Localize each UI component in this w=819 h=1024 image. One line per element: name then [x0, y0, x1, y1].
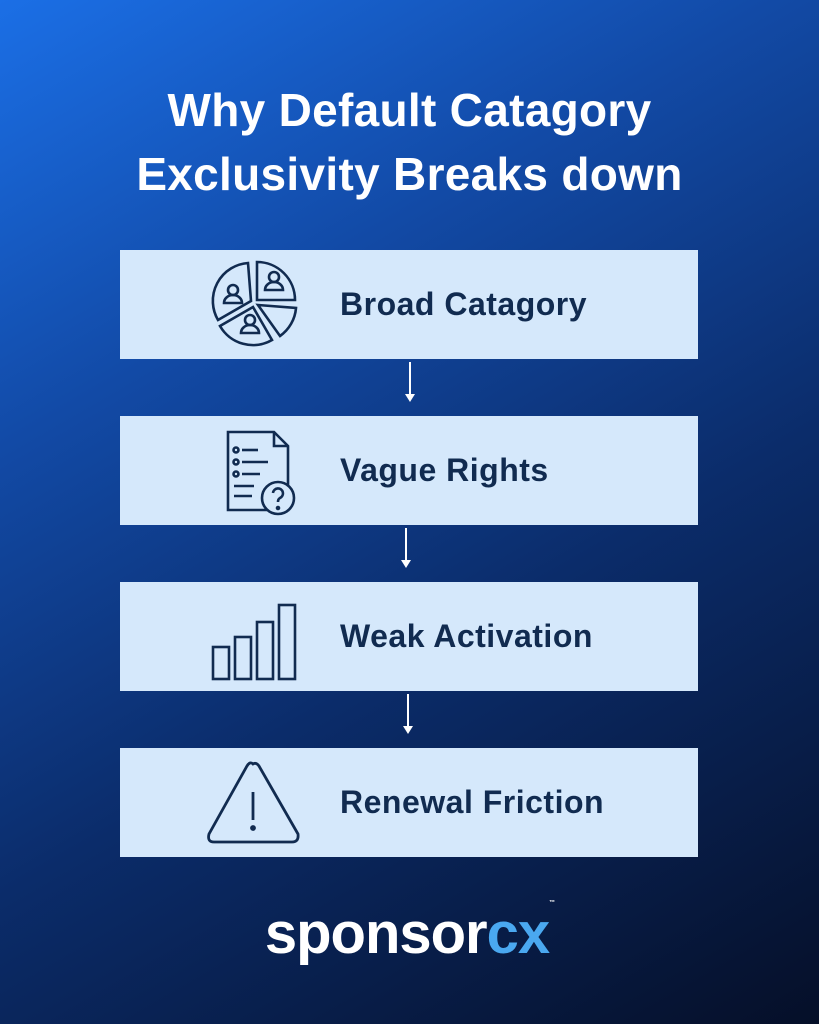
arrow 2	[401, 528, 411, 568]
panel: broad category	[120, 250, 698, 359]
panel: vague rights	[120, 416, 698, 525]
panel: weak activation	[120, 582, 698, 691]
title: Exclusivity Breaks down	[136, 148, 683, 200]
logo: sponsorcx™	[265, 900, 554, 966]
label: Broad Catagory	[340, 286, 587, 322]
icon: warning triangle	[207, 762, 300, 844]
title: Why Default Catagory	[168, 84, 651, 136]
icon: bar chart	[212, 604, 296, 680]
label: Vague Rights	[340, 452, 549, 488]
icon: document question	[226, 430, 296, 516]
icon: pie chart people	[212, 260, 298, 346]
arrow 1	[405, 362, 415, 402]
panel: renewal friction	[120, 748, 698, 857]
arrow 3	[403, 694, 413, 734]
label: Weak Activation	[340, 618, 593, 654]
title	[136, 84, 683, 200]
label: Renewal Friction	[340, 784, 604, 820]
